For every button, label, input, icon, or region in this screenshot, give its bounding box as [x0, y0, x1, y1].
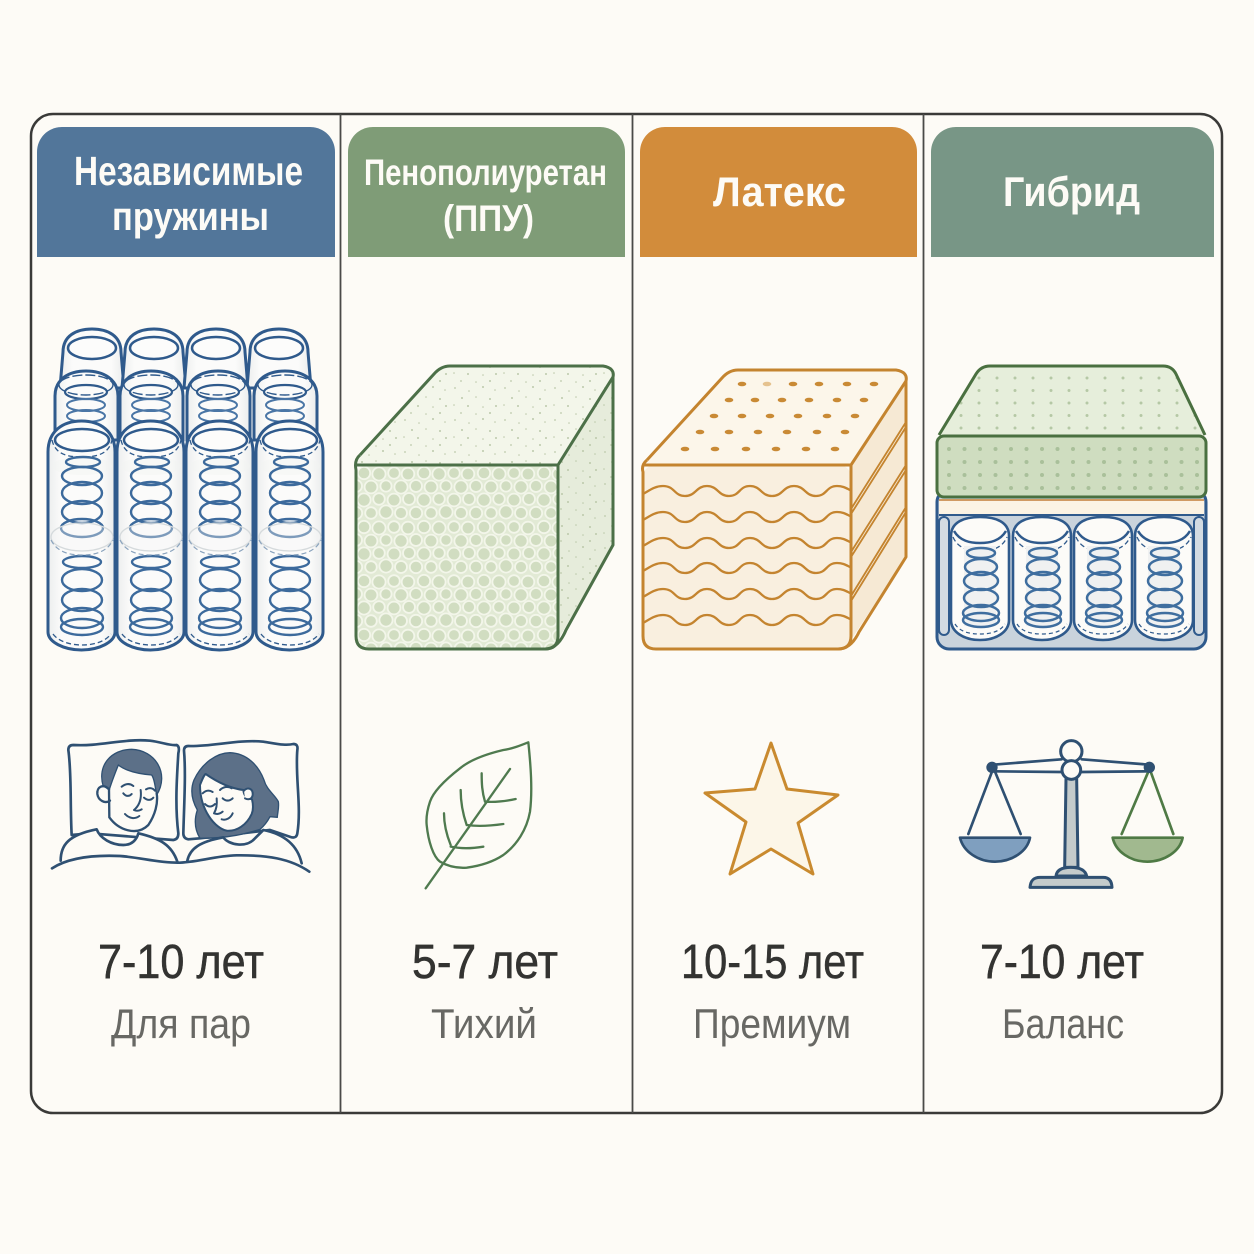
column: independent springs [37, 127, 335, 1047]
header: polyurethane foam: (ППУ) [443, 198, 534, 239]
icon: sleeping couple [52, 740, 309, 872]
header: hybrid: Гибрид [1003, 168, 1140, 215]
column: hybrid [931, 127, 1214, 1047]
header: polyurethane foam [348, 127, 625, 257]
header: latex: Латекс [713, 168, 846, 215]
lifespan: independent springs: 7-10 лет [98, 936, 264, 989]
header: independent springs: пружины [112, 195, 269, 239]
column: latex [640, 127, 917, 1047]
illustration: hybrid mattress [937, 366, 1206, 649]
illustration: pocket springs [48, 329, 323, 650]
header: hybrid [931, 127, 1214, 257]
column: polyurethane foam [348, 127, 625, 1047]
header: latex [640, 127, 917, 257]
header: polyurethane foam: Пенополиуретан [364, 152, 607, 193]
lifespan: latex: 10-15 лет [681, 936, 864, 989]
illustration: latex block [642, 370, 906, 649]
lifespan: hybrid: 7-10 лет [980, 936, 1144, 989]
feature: balance: Баланс [1002, 1000, 1124, 1047]
header: independent springs [37, 127, 335, 257]
feature: for couples: Для пар [111, 1000, 251, 1047]
header: independent springs: Независимые [74, 148, 303, 194]
icon: star [705, 743, 838, 874]
feature: premium: Премиум [693, 1000, 851, 1047]
lifespan: polyurethane foam: 5-7 лет [412, 936, 558, 989]
comparison table frame [31, 114, 1222, 1113]
icon: balance scale [960, 741, 1183, 887]
icon: leaf [426, 742, 531, 888]
illustration: foam block [356, 366, 613, 649]
feature: quiet: Тихий [431, 1000, 537, 1047]
